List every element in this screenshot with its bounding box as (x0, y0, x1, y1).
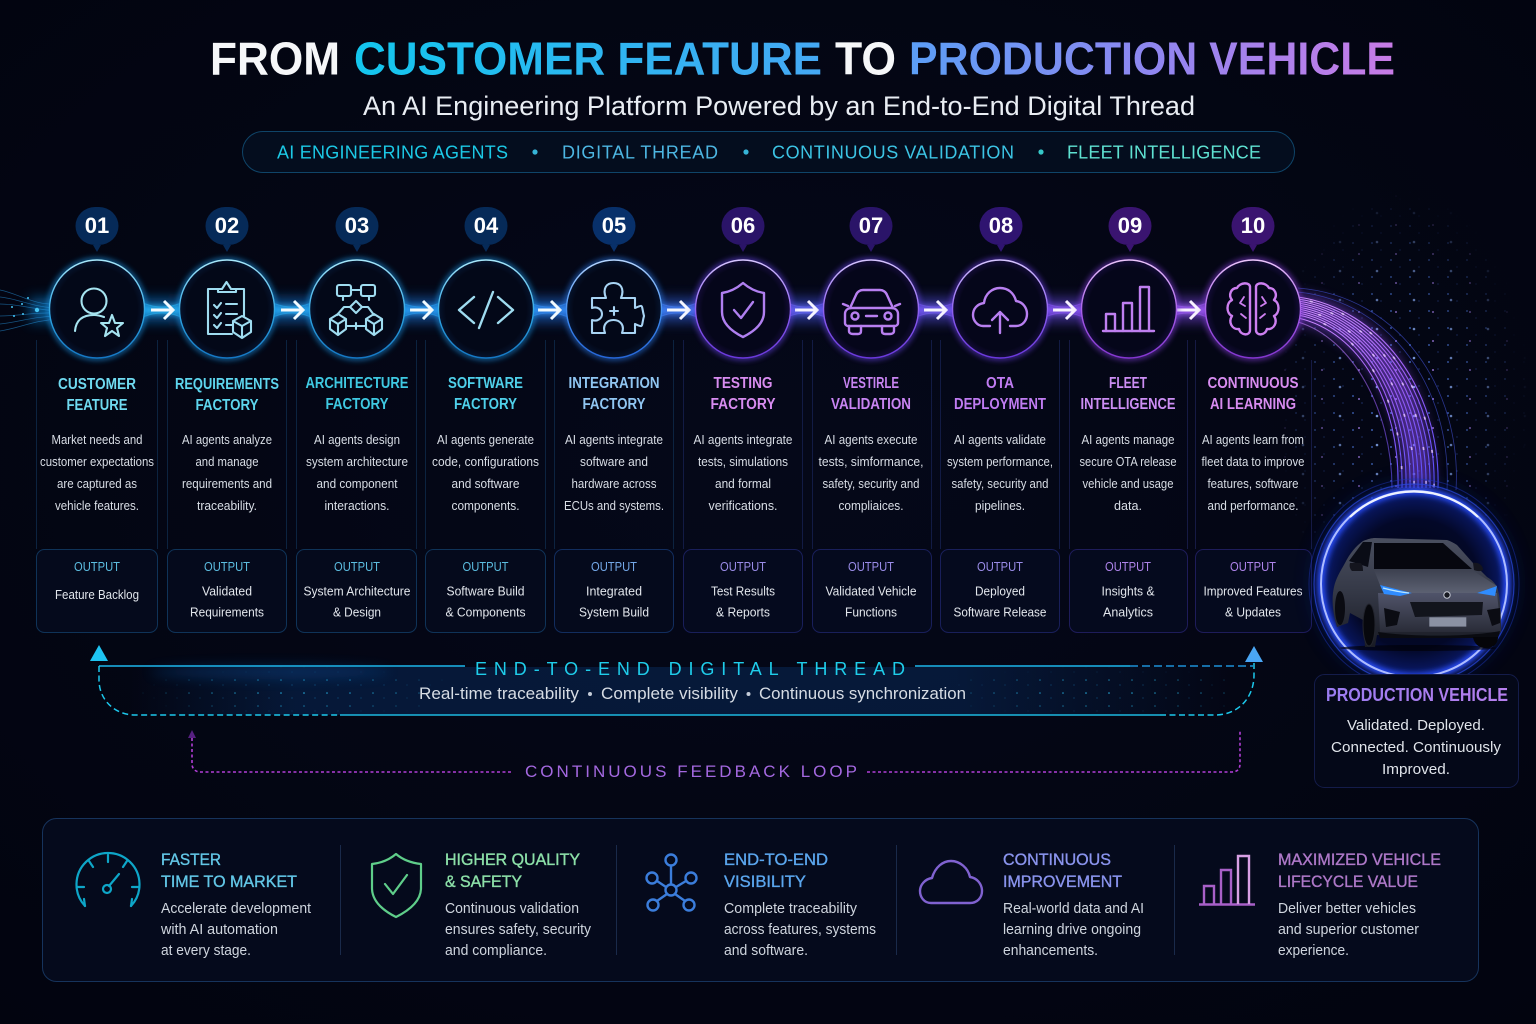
connector: step 6 to 7 (741, 286, 871, 334)
output box: Requirements (190, 604, 264, 620)
description: data. (1114, 498, 1142, 513)
connector: step 4 to 5 (484, 286, 614, 334)
description: AI agents learn from (1202, 432, 1304, 447)
text: and compliance. (445, 943, 547, 959)
description: tests, simulations (698, 454, 788, 469)
description: pipelines. (975, 498, 1025, 513)
icon: cloud upload (973, 288, 1027, 333)
icon: person with star (75, 288, 123, 336)
production vehicle with halo ring (1309, 479, 1519, 689)
arrowhead left (90, 645, 108, 661)
heading: VESTIRLE (843, 375, 899, 392)
icon: brain (1228, 283, 1278, 334)
description: customer expectations (40, 454, 154, 469)
heading: DEPLOYMENT (954, 396, 1046, 413)
output box: Integrated (586, 584, 642, 598)
description: traceability. (197, 498, 257, 513)
thread subtitle: Real-time traceability (419, 684, 579, 703)
description: fleet data to improve (1202, 454, 1304, 469)
description: tests, simformance, (818, 454, 924, 469)
heading: FACTORY (582, 396, 646, 413)
output box: OUTPUT (591, 560, 637, 574)
pill: key themes: FLEET INTELLIGENCE (1067, 142, 1261, 162)
text: Real-world data and AI (1003, 901, 1144, 917)
description: Market needs and (52, 432, 142, 447)
heading (1208, 375, 1299, 413)
text: FASTER (161, 851, 221, 869)
description (1080, 432, 1176, 513)
connector: step 1 to 2 (97, 286, 227, 334)
connector: step 2 to 3 (227, 286, 357, 334)
description: hardware across (572, 476, 657, 491)
text: across features, systems (724, 922, 876, 938)
output box (940, 550, 1060, 632)
description (1202, 432, 1304, 513)
output box: OUTPUT (1105, 560, 1151, 574)
output box: Analytics (1103, 604, 1153, 620)
heading: TESTING (714, 375, 772, 392)
output box (684, 550, 802, 632)
icon: shield (372, 854, 421, 917)
description: and software (452, 476, 520, 491)
connector: step 3 to 4 (356, 286, 486, 334)
node circle 07 (824, 260, 918, 358)
description: AI agents integrate (565, 432, 663, 447)
connector: step 8 to 9 (999, 286, 1129, 334)
description: code, configurations (432, 454, 539, 469)
fiber stream to production vehicle (1284, 196, 1526, 544)
badge 09: 09 (1118, 213, 1142, 238)
connector: step 9 to 10 (1123, 286, 1253, 334)
output box: OUTPUT (334, 560, 380, 574)
output box: Insights & (1102, 584, 1155, 598)
output box: OUTPUT (462, 560, 509, 574)
description (182, 432, 272, 513)
digital thread ribbon (0, 286, 1300, 334)
output box: OUTPUT (1230, 560, 1276, 574)
text: END-TO-END (724, 851, 828, 869)
text: with AI automation (160, 922, 278, 938)
badge 07 (850, 207, 892, 252)
icon: puzzle piece (592, 283, 644, 333)
text: experience. (1278, 943, 1349, 959)
badge 03: 03 (345, 213, 369, 238)
heading: AI LEARNING (1210, 396, 1296, 413)
text: at every stage. (161, 943, 251, 959)
description: requirements and (182, 476, 272, 491)
thread subtitle: Complete visibility (601, 684, 738, 703)
output box (554, 550, 674, 632)
connector: step 5 to 6 (613, 286, 743, 334)
description: and formal (715, 476, 771, 491)
panel: production vehicle caption: Improved. (1382, 761, 1450, 778)
description: are captured as (57, 476, 137, 491)
heading: FACTORY (326, 396, 389, 413)
title: PRODUCTION VEHICLE (909, 32, 1395, 84)
badge 10: 10 (1241, 213, 1265, 238)
text: HIGHER QUALITY (445, 851, 580, 869)
description: safety, security and (822, 476, 920, 491)
continuous feedback loop (188, 730, 1240, 781)
output box (812, 550, 932, 632)
panel: step 03 architecture factory (296, 207, 416, 632)
text: VISIBILITY (724, 873, 806, 891)
text: IMPROVEMENT (1003, 873, 1122, 891)
output box: Functions (845, 604, 897, 620)
icon: speedometer (76, 853, 140, 906)
description: vehicle and usage (1082, 476, 1174, 491)
description (694, 432, 792, 513)
text (160, 851, 311, 959)
text: LIFECYCLE VALUE (1278, 873, 1418, 891)
output box (426, 550, 546, 632)
heading: INTEGRATION (568, 375, 660, 392)
badge 01 (76, 207, 119, 252)
output box: Deployed (975, 584, 1025, 598)
text: Complete traceability (724, 901, 858, 917)
pill: key themes (242, 132, 1294, 172)
description (564, 432, 664, 513)
output box: & Updates (1225, 604, 1281, 620)
title: FROM (210, 32, 340, 84)
description: AI agents design (314, 432, 400, 447)
description: secure OTA release (1080, 454, 1176, 469)
badge 10 (1232, 207, 1275, 252)
output box (1196, 550, 1312, 632)
panel: step 07 vehicle validation (812, 207, 932, 632)
heading: ARCHITECTURE (306, 375, 409, 392)
badge 04 (464, 207, 508, 252)
heading: FACTORY (710, 396, 776, 413)
output box: & Design (333, 604, 381, 620)
icon: car (1333, 538, 1501, 651)
heading (710, 375, 776, 413)
output box: OUTPUT (204, 560, 250, 574)
icon: bar chart (1103, 287, 1154, 331)
output box (168, 550, 286, 632)
heading: FACTORY (454, 396, 517, 413)
thread subtitle (419, 684, 966, 703)
panel: step 08 ota deployment (940, 207, 1060, 632)
description: AI agents validate (954, 432, 1046, 447)
node circle 04 (438, 260, 534, 358)
heading (175, 376, 279, 414)
heading (448, 375, 523, 413)
heading (306, 375, 409, 413)
description (306, 432, 408, 513)
node circle 03 (310, 260, 404, 358)
description: features, software (1208, 476, 1298, 491)
panel: step 09 fleet intelligence (1070, 207, 1188, 632)
panel: step 04 software factory (426, 207, 546, 632)
badge 04: 04 (474, 213, 499, 238)
benefit: continuous improvement (920, 851, 1144, 959)
badge 05: 05 (602, 213, 626, 238)
description: components. (452, 498, 520, 513)
description: software and (580, 454, 648, 469)
output box: OUTPUT (977, 560, 1023, 574)
icon: architecture blocks (330, 285, 382, 335)
badge 03 (336, 207, 379, 252)
description: AI agents generate (437, 432, 534, 447)
heading: INTELLIGENCE (1080, 396, 1176, 413)
text (445, 851, 592, 959)
badge 08 (980, 207, 1022, 252)
arrowhead right (1245, 646, 1263, 662)
panel: production vehicle caption (1314, 674, 1518, 788)
node circle 08 (952, 260, 1048, 358)
description (40, 432, 154, 513)
node circle 02 (180, 260, 274, 358)
text: TIME TO MARKET (161, 873, 297, 891)
heading: CUSTOMER (58, 376, 136, 393)
output box: Improved Features (1204, 584, 1303, 598)
heading: SOFTWARE (448, 375, 523, 392)
panel: step 02 requirements factory (168, 207, 286, 632)
text: ensures safety, security (445, 922, 592, 938)
output box: OUTPUT (720, 560, 766, 574)
panel: step 06 testing factory (684, 207, 802, 632)
heading (1080, 375, 1176, 413)
text (1278, 851, 1441, 959)
text: and superior customer (1278, 922, 1419, 938)
description (432, 432, 539, 513)
description: compliaices. (838, 498, 904, 513)
description: verifications. (708, 498, 778, 513)
heading (831, 375, 911, 413)
panel: benefits (42, 818, 1478, 982)
output box: System Build (579, 604, 649, 620)
description: vehicle features. (55, 498, 139, 513)
output box (1070, 550, 1188, 632)
output box: OUTPUT (74, 560, 120, 574)
thread subtitle: Continuous synchronization (759, 684, 966, 703)
icon: code brackets (459, 292, 513, 328)
description: and manage (196, 454, 258, 469)
badge 06: 06 (731, 213, 755, 238)
text: enhancements. (1003, 943, 1098, 959)
end-to-end digital thread loop (90, 645, 1263, 720)
output box: & Reports (716, 604, 770, 620)
thread label: END-TO-END DIGITAL THREAD (475, 659, 905, 679)
output box: System Architecture (304, 584, 410, 598)
output box (36, 550, 158, 632)
panel: step 05 integration factory (554, 207, 674, 632)
heading: FLEET (1109, 375, 1147, 392)
description: system performance, (947, 454, 1053, 469)
badge 02: 02 (215, 213, 239, 238)
description: AI agents analyze (182, 432, 272, 447)
icon: cloud (920, 861, 982, 903)
output box (296, 550, 416, 632)
continuous feedback loop: CONTINUOUS FEEDBACK LOOP (525, 762, 857, 781)
title: TO (835, 32, 896, 84)
text: & SAFETY (445, 873, 522, 891)
node circle 05 (566, 260, 662, 358)
description: AI agents manage (1082, 432, 1174, 447)
icon: network hub (646, 854, 696, 910)
heading: REQUIREMENTS (175, 376, 279, 393)
panel: production vehicle caption: Connected. Continuously (1331, 739, 1502, 756)
icon: bars (1199, 856, 1255, 904)
badge 05 (592, 207, 636, 252)
output box: & Components (446, 604, 526, 620)
badge 01: 01 (85, 213, 109, 238)
panel: step 01 customer feature (36, 207, 158, 632)
description: ECUs and systems. (564, 498, 664, 513)
text (724, 851, 876, 959)
heading: CONTINUOUS (1208, 375, 1299, 392)
panel: step 10 continuous ai learning (1196, 207, 1312, 632)
text: learning drive ongoing (1003, 922, 1141, 938)
heading: FEATURE (66, 397, 128, 414)
heading: FACTORY (196, 397, 259, 414)
icon: clipboard checklist with cube (208, 282, 251, 338)
heading (568, 375, 660, 413)
node circle 09 (1082, 260, 1176, 358)
benefit: faster time to market (76, 851, 311, 959)
text (1003, 851, 1144, 959)
description: safety, security and (952, 476, 1048, 491)
node circle 01 (50, 260, 144, 358)
heading (58, 376, 136, 414)
output box: OUTPUT (848, 560, 894, 574)
output box: Validated (202, 584, 252, 598)
pill: key themes: CONTINUOUS VALIDATION (772, 142, 1014, 162)
description (818, 432, 924, 513)
icon: shield check (722, 283, 764, 337)
description: and component (316, 476, 398, 491)
description: AI agents execute (824, 432, 918, 447)
text: Continuous validation (445, 901, 579, 917)
text: Accelerate development (161, 901, 311, 917)
text: CONTINUOUS (1003, 851, 1111, 869)
heading: VALIDATION (831, 396, 911, 413)
node circle 06 (696, 260, 790, 358)
node circle 10 (1206, 260, 1300, 358)
title: CUSTOMER FEATURE (354, 32, 822, 84)
badge 09 (1108, 207, 1152, 252)
pill: key themes: AI ENGINEERING AGENTS (277, 142, 508, 162)
description: AI agents integrate (694, 432, 792, 447)
benefit: maximized vehicle lifecycle value (1199, 851, 1441, 959)
badge 02 (206, 207, 249, 252)
output box: Validated Vehicle (826, 584, 916, 598)
benefit: end-to-end visibility (646, 851, 876, 959)
badge 08: 08 (989, 213, 1013, 238)
badge 07: 07 (859, 213, 883, 238)
text: Deliver better vehicles (1278, 901, 1416, 917)
connector: step 7 to 8 (870, 286, 1000, 334)
heading: OTA (986, 375, 1014, 392)
description: system architecture (306, 454, 408, 469)
panel: production vehicle caption: Validated. Deployed. (1347, 717, 1485, 734)
subtitle: An AI Engineering Platform Powered by an End-to-End Digital Thread (363, 91, 1195, 121)
output box: Software Release (954, 604, 1046, 620)
benefit: higher quality and safety (372, 851, 592, 959)
output box: Test Results (711, 584, 775, 598)
heading (954, 375, 1046, 413)
description (947, 432, 1053, 513)
description: interactions. (324, 498, 390, 513)
icon: car front (843, 290, 900, 334)
pill: key themes: DIGITAL THREAD (562, 142, 718, 162)
output box: Software Build (446, 584, 524, 598)
text: MAXIMIZED VEHICLE (1278, 851, 1441, 869)
description: and performance. (1208, 498, 1298, 513)
panel: production vehicle caption: PRODUCTION VEHICLE (1326, 685, 1508, 705)
text: and software. (724, 943, 808, 959)
output box: Feature Backlog (55, 587, 139, 602)
badge 06 (722, 207, 764, 252)
